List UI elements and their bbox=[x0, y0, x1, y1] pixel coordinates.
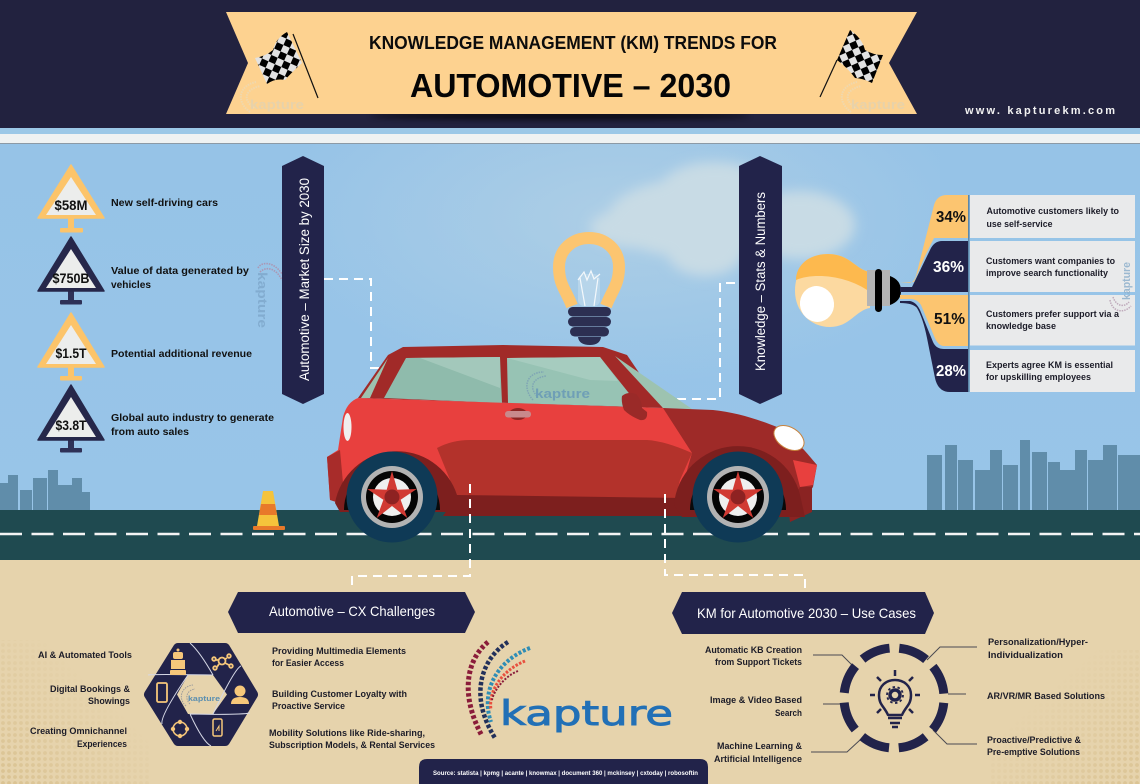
banner: use cases bbox=[672, 592, 934, 634]
panel: CX challenges bbox=[30, 643, 435, 751]
left captions: Creating Omnichannel bbox=[30, 726, 127, 737]
sign captions: New self-driving cars bbox=[111, 197, 218, 209]
sign captions bbox=[111, 197, 274, 438]
segment 34% bbox=[900, 195, 968, 283]
icon: person bbox=[231, 686, 249, 704]
icon: mobile with nodes bbox=[213, 719, 222, 736]
card 3: Customers prefer support via a bbox=[986, 309, 1120, 320]
banner: CX challenges bbox=[228, 592, 475, 633]
icon: side light bulb bbox=[795, 254, 901, 327]
kapture logo bbox=[468, 642, 673, 738]
card 2 bbox=[933, 241, 1135, 292]
hood bbox=[663, 408, 817, 505]
rear wheel arch bbox=[335, 451, 457, 512]
panel: knowledge stats funnel bbox=[795, 195, 1135, 392]
sand ground panel bbox=[1, 656, 1139, 784]
title line 2: AUTOMOTIVE – 2030 bbox=[410, 67, 731, 104]
right captions: Mobility Solutions like Ride-sharing, bbox=[269, 728, 425, 739]
front wheel bbox=[692, 452, 784, 542]
card 1: Automotive customers likely to bbox=[986, 206, 1119, 217]
hexagon cycle graphic bbox=[148, 643, 253, 746]
skyline right bbox=[927, 440, 1140, 510]
sign: $3.8T: $3.8T bbox=[56, 418, 87, 433]
right captions: Individualization bbox=[988, 650, 1063, 661]
sign captions: Value of data generated by bbox=[111, 265, 249, 277]
rear glass sliver bbox=[361, 358, 388, 398]
divider bbox=[968, 195, 970, 392]
segmented ring bbox=[844, 648, 944, 748]
sign captions: vehicles bbox=[111, 279, 151, 291]
rear tyre well bbox=[344, 462, 440, 510]
banner: market size: Automotive – Market Size by 2030 bbox=[297, 178, 312, 381]
windscreen bbox=[615, 356, 692, 409]
rear bumper bbox=[327, 450, 345, 505]
watermark: hexagon centre: kapture bbox=[188, 694, 220, 703]
card 2: Customers want companies to bbox=[986, 256, 1115, 267]
skyline left bbox=[0, 470, 90, 510]
dashed connector: market size bbox=[324, 279, 421, 368]
watermark: car window bbox=[527, 372, 590, 401]
title line 1: KNOWLEDGE MANAGEMENT (KM) TRENDS FOR bbox=[369, 32, 777, 53]
card 4 bbox=[936, 350, 1135, 392]
watermark: market size: kapture bbox=[255, 272, 270, 328]
watermark: right ribbon: kapture bbox=[851, 97, 905, 112]
card 3: knowledge base bbox=[986, 321, 1056, 332]
segment 36% bbox=[900, 241, 968, 292]
sign: $750B bbox=[38, 237, 104, 304]
icon: traffic cone bbox=[253, 491, 285, 530]
headlight bbox=[769, 420, 809, 456]
card 2: 36% bbox=[933, 259, 964, 276]
rear wheel bbox=[346, 452, 438, 542]
watermark: right ribbon bbox=[842, 82, 905, 112]
lower door panel bbox=[437, 440, 692, 500]
right captions: Subscription Models, & Rental Services bbox=[269, 740, 435, 751]
right captions: for Easier Access bbox=[272, 658, 344, 669]
card 4: 28% bbox=[936, 363, 966, 380]
card 1 bbox=[936, 195, 1135, 238]
banner: stats and numbers bbox=[739, 156, 782, 404]
banner: market size bbox=[282, 156, 324, 404]
sign: $1.5T: $1.5T bbox=[56, 346, 87, 361]
watermark: left ribbon bbox=[241, 82, 304, 112]
dashed connector: CX challenges bbox=[352, 484, 470, 590]
rear side window bbox=[384, 357, 502, 403]
right captions: Proactive/Predictive & bbox=[987, 735, 1081, 746]
dashed connector: stats bbox=[660, 283, 735, 399]
watermark: market size bbox=[255, 264, 285, 328]
source bar: Source: statista | kpmg | acante | knowmax | document 360 | mckinsey | cxtoday | robosoftin bbox=[433, 770, 698, 777]
car illustration bbox=[327, 345, 817, 542]
sign captions: Potential additional revenue bbox=[111, 348, 252, 360]
front tyre well bbox=[690, 462, 786, 510]
source bar bbox=[419, 759, 708, 784]
left captions: Showings bbox=[88, 696, 130, 707]
left captions: Digital Bookings & bbox=[50, 684, 130, 695]
right captions: Providing Multimedia Elements bbox=[272, 646, 406, 657]
door handle bbox=[505, 408, 531, 420]
right captions bbox=[987, 637, 1105, 758]
icon: right checkered flag bbox=[820, 30, 883, 97]
segment 51% bbox=[900, 295, 968, 346]
left captions: Automatic KB Creation bbox=[705, 645, 802, 656]
sill bbox=[443, 495, 687, 516]
sign captions: Global auto industry to generate bbox=[111, 412, 274, 424]
ribbon shadow bbox=[370, 112, 750, 120]
wing mirror bbox=[622, 393, 647, 420]
left captions bbox=[30, 650, 132, 750]
left captions: AI & Automated Tools bbox=[38, 650, 132, 661]
right captions: Pre-emptive Solutions bbox=[987, 747, 1080, 758]
watermark: stats cards bbox=[1110, 262, 1133, 311]
card 3 bbox=[934, 295, 1135, 346]
segment 28% bbox=[900, 301, 968, 392]
cloud bbox=[590, 162, 855, 276]
left captions: Search bbox=[775, 708, 802, 719]
sign: $3.8T bbox=[38, 385, 104, 452]
card 1: 34% bbox=[936, 209, 966, 226]
front bumper bbox=[793, 460, 817, 487]
website url: www. kapturekm.com bbox=[964, 105, 1115, 117]
sign: $58M: $58M bbox=[54, 198, 88, 213]
banner: use cases: KM for Automotive 2030 – Use Cases bbox=[697, 605, 916, 621]
right captions: AR/VR/MR Based Solutions bbox=[987, 691, 1105, 702]
watermark: left ribbon: kapture bbox=[250, 97, 304, 112]
dashed connector: use cases bbox=[665, 494, 805, 590]
card 1: use self-service bbox=[986, 219, 1052, 230]
sign: $58M bbox=[38, 165, 104, 232]
right captions: Building Customer Loyalty with bbox=[272, 689, 407, 700]
icon: bulb with gear bbox=[870, 670, 920, 727]
card 2: improve search functionality bbox=[986, 268, 1109, 279]
leader lines bbox=[811, 647, 977, 752]
panel: KM use cases bbox=[705, 637, 1105, 765]
front wheel arch bbox=[674, 446, 805, 517]
left captions: Experiences bbox=[77, 739, 127, 750]
title ribbon bbox=[226, 12, 917, 114]
icon: robot bbox=[170, 648, 186, 675]
card 4: Experts agree KM is essential bbox=[986, 360, 1113, 371]
rear light bbox=[344, 413, 352, 441]
road bbox=[0, 510, 1140, 560]
left captions: Machine Learning & bbox=[717, 741, 802, 752]
sign: $1.5T bbox=[38, 313, 104, 380]
sky background bbox=[0, 143, 1140, 511]
main body bbox=[327, 398, 692, 500]
icon: smartphone bbox=[157, 683, 167, 702]
left captions bbox=[705, 645, 802, 765]
card 3: 51% bbox=[934, 311, 965, 328]
banner: CX challenges: Automotive – CX Challenges bbox=[269, 603, 435, 619]
icon: omnichannel circle bbox=[171, 720, 189, 738]
right captions: Personalization/Hyper- bbox=[988, 637, 1088, 648]
icon: left checkered flag bbox=[255, 32, 318, 98]
left captions: Image & Video Based bbox=[710, 695, 802, 706]
left captions: from Support Tickets bbox=[715, 657, 802, 668]
watermark: car window: kapture bbox=[535, 386, 590, 401]
banner: stats and numbers: Knowledge – Stats & Numbers bbox=[753, 192, 768, 371]
watermark: stats cards: kapture bbox=[1121, 262, 1133, 300]
sign captions: from auto sales bbox=[111, 426, 189, 438]
card 4: for upskilling employees bbox=[986, 372, 1091, 383]
panel: market size signs bbox=[38, 165, 274, 452]
icon: light bulb on car bbox=[559, 238, 619, 345]
icon: network bbox=[212, 654, 233, 670]
header band bbox=[0, 0, 1140, 144]
car roof and pillars bbox=[358, 345, 663, 408]
front side window bbox=[507, 357, 640, 407]
left captions: Artificial Intelligence bbox=[714, 754, 802, 765]
sign: $750B: $750B bbox=[52, 271, 90, 286]
right captions: Proactive Service bbox=[272, 701, 345, 712]
right captions bbox=[269, 646, 435, 751]
kapture logo: kapture bbox=[500, 694, 673, 734]
